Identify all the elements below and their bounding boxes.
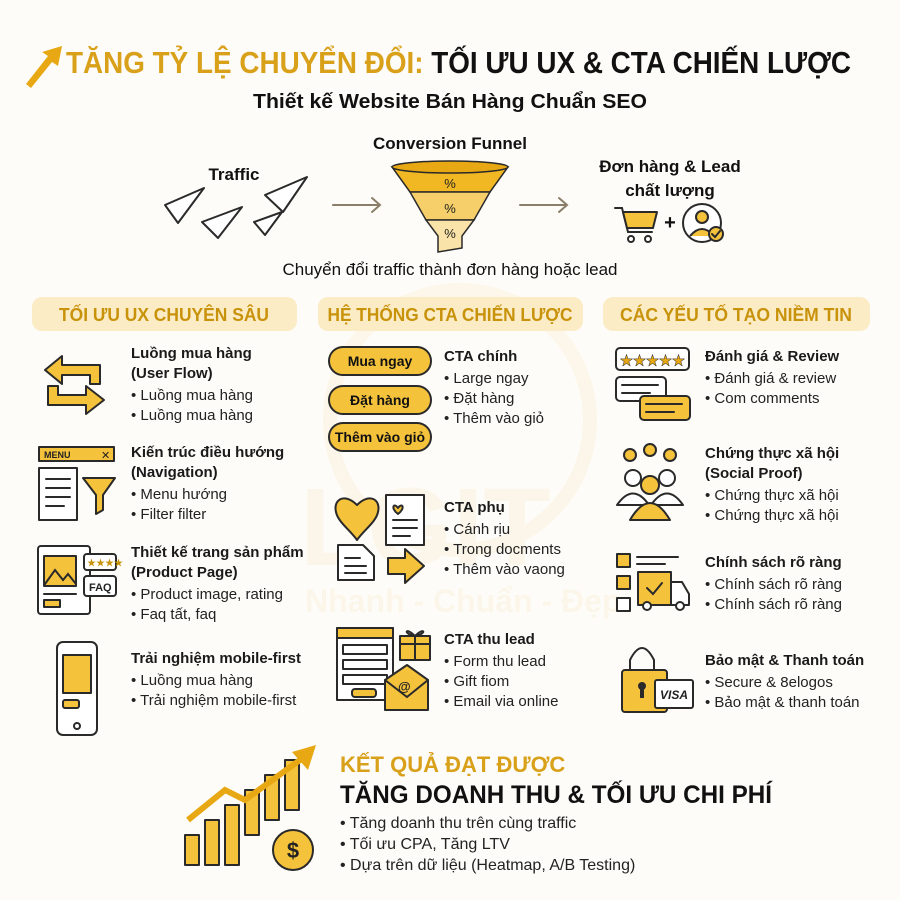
icon: growth chart: $ xyxy=(287,838,299,863)
results section: KẾT QUẢ ĐẠT ĐƯỢC xyxy=(340,752,565,777)
funnel: Conversion Funnel xyxy=(373,134,527,153)
item: main CTA buttons xyxy=(329,347,544,451)
column 2: CTA xyxy=(318,297,583,710)
item: social proof: • Chứng thực xã hội xyxy=(705,507,839,524)
item: navigation: • Menu hướng xyxy=(131,486,227,503)
funnel xyxy=(373,134,527,252)
item: lead CTA: @ xyxy=(398,679,411,694)
item: reviews: • Com comments xyxy=(705,390,819,407)
item: security xyxy=(622,648,864,712)
item: navigation: • Filter filter xyxy=(131,506,206,523)
subtitle: Thiết kế Website Bán Hàng Chuẩn SEO xyxy=(253,91,647,113)
heading xyxy=(603,297,870,331)
funnel: % xyxy=(444,201,456,216)
column 3: Trust xyxy=(603,297,870,712)
item: policy: • Chính sách rõ ràng xyxy=(705,576,842,593)
results section: • Tối ưu CPA, Tăng LTV xyxy=(340,836,510,853)
item: security: • Secure & 8elogos xyxy=(705,674,833,691)
item: main CTA buttons: Thêm vào giỏ xyxy=(335,429,425,445)
arrow xyxy=(333,198,380,212)
orders & leads: + xyxy=(664,212,676,234)
item: lead CTA xyxy=(337,628,558,710)
results section: • Dựa trên dữ liệu (Heatmap, A/B Testing) xyxy=(340,857,635,874)
item: navigation: Kiến trúc điều hướng xyxy=(131,444,284,461)
results section xyxy=(185,745,773,874)
item: user flow: • Luồng mua hàng xyxy=(131,407,253,424)
item: policy: Chính sách rõ ràng xyxy=(705,554,842,571)
item: secondary CTA: • Cánh rịu xyxy=(444,521,510,538)
traffic: Traffic xyxy=(208,165,260,184)
item: product page: FAQ xyxy=(89,582,112,594)
item: user flow xyxy=(45,345,253,424)
item: social proof: Chứng thực xã hội xyxy=(705,445,839,462)
item: user flow: • Luồng mua hàng xyxy=(131,387,253,404)
item: secondary CTA: • Thêm vào vaong xyxy=(444,561,565,578)
results section: TĂNG DOANH THU & TỐI ƯU CHI PHÍ xyxy=(340,779,773,809)
orders & leads: Đơn hàng & Lead xyxy=(599,157,741,176)
heading xyxy=(318,297,583,331)
heading: TỐI ƯU UX CHUYÊN SÂU xyxy=(59,304,269,325)
arrow xyxy=(520,198,567,212)
item: main CTA buttons: Đặt hàng xyxy=(350,392,410,408)
item: main CTA buttons: CTA chính xyxy=(444,348,517,365)
item: policy: • Chính sách rõ ràng xyxy=(705,596,842,613)
item: lead CTA: • Email via online xyxy=(444,693,558,710)
traffic xyxy=(165,165,307,238)
heading xyxy=(32,297,297,331)
item: product page: (Product Page) xyxy=(131,564,238,581)
item: reviews: ★★★★★ xyxy=(620,353,685,368)
funnel diagram: Chuyển đổi traffic thành đơn hàng hoặc lead xyxy=(282,260,618,279)
item: reviews: • Đánh giá & review xyxy=(705,370,836,387)
item: navigation: ✕ xyxy=(101,450,110,462)
funnel: % xyxy=(444,176,456,191)
item: mobile: Trải nghiệm mobile-first xyxy=(131,650,301,667)
item: mobile: • Trải nghiệm mobile-first xyxy=(131,692,297,709)
item: main CTA buttons: • Thêm vào giỏ xyxy=(444,410,544,427)
orders & leads xyxy=(599,157,741,242)
item: reviews xyxy=(616,348,840,420)
item: mobile xyxy=(57,642,301,735)
item: main CTA buttons: • Large ngay xyxy=(444,370,529,387)
results section: • Tăng doanh thu trên cùng traffic xyxy=(340,815,576,832)
watermark xyxy=(300,290,621,619)
icon: title arrow xyxy=(26,46,62,88)
item: product page xyxy=(38,544,304,623)
item: secondary CTA xyxy=(336,495,565,583)
item: lead CTA: • Gift fiom xyxy=(444,673,509,690)
icon: growth chart xyxy=(185,745,316,870)
item: product page: • Faq tất, faq xyxy=(131,606,216,623)
item: navigation: (Navigation) xyxy=(131,464,218,481)
item: lead CTA: • Form thu lead xyxy=(444,653,546,670)
column 1: UX xyxy=(32,297,304,735)
item: secondary CTA: • Trong docments xyxy=(444,541,561,558)
item: navigation xyxy=(39,444,284,523)
watermark: LGIT xyxy=(300,466,551,589)
item: security: • Bảo mật & thanh toán xyxy=(705,694,860,711)
item: security: Bảo mật & Thanh toán xyxy=(705,652,864,669)
item: lead CTA: CTA thu lead xyxy=(444,631,535,648)
item: mobile: • Luồng mua hàng xyxy=(131,672,253,689)
funnel diagram xyxy=(165,134,741,279)
item: security: VISA xyxy=(660,688,688,702)
funnel: % xyxy=(444,226,456,241)
item: social proof: (Social Proof) xyxy=(705,465,803,482)
item: product page: ★★★★ xyxy=(87,558,123,568)
title: TĂNG TỶ LỆ CHUYỂN ĐỔI: TỐI ƯU UX & CTA CHIẾN LƯỢC xyxy=(66,44,851,80)
item: product page: • Product image, rating xyxy=(131,586,283,603)
item: main CTA buttons: Mua ngay xyxy=(348,353,412,369)
item: social proof xyxy=(617,444,839,524)
item: social proof: • Chứng thực xã hội xyxy=(705,487,839,504)
item: main CTA buttons: • Đặt hàng xyxy=(444,390,514,407)
item: user flow: Luồng mua hàng xyxy=(131,345,252,362)
item: secondary CTA: CTA phụ xyxy=(444,499,505,516)
orders & leads: chất lượng xyxy=(625,181,715,200)
item: reviews: Đánh giá & Review xyxy=(705,348,840,365)
item: user flow: (User Flow) xyxy=(131,365,213,382)
item: product page: Thiết kế trang sản phẩm xyxy=(131,544,304,561)
item: navigation: MENU xyxy=(44,450,70,460)
heading: CÁC YẾU TỐ TẠO NIỀM TIN xyxy=(620,304,852,325)
item: policy xyxy=(617,554,842,613)
heading: HỆ THỐNG CTA CHIẾN LƯỢC xyxy=(328,304,572,325)
watermark: Nhanh - Chuẩn - Đẹp xyxy=(305,583,621,619)
